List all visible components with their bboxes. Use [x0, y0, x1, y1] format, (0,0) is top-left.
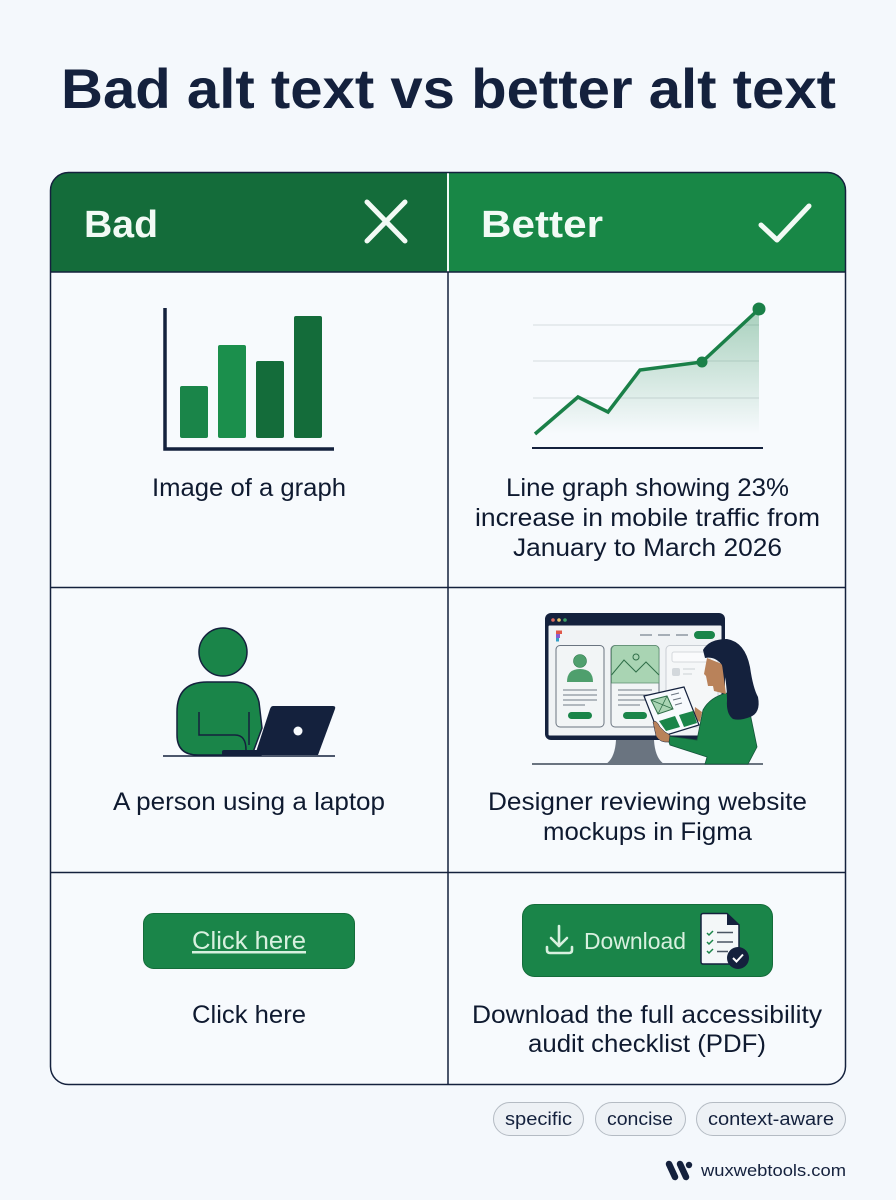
tag: concise: concise	[607, 1108, 673, 1129]
button: click here	[144, 914, 354, 968]
icon: download arrow	[547, 926, 572, 953]
tag: context-aware: context-aware	[708, 1108, 834, 1129]
header: bad column	[50, 172, 448, 272]
icon: checklist document	[701, 914, 749, 969]
button label: Download	[584, 928, 686, 954]
tag: context-aware	[696, 1102, 846, 1136]
woman with printed mockup	[644, 639, 759, 764]
comparison table	[50, 172, 846, 1085]
icon: bar chart	[165, 308, 334, 449]
text: better alt link: Download the full accessibility	[472, 1001, 823, 1029]
icon: cross	[367, 202, 405, 241]
illustration: designer reviewing mockups	[532, 613, 763, 764]
button: download	[522, 904, 772, 976]
text: bad alt person: A person using a laptop	[113, 788, 385, 816]
text: better alt graph: increase in mobile traffic from	[475, 504, 820, 532]
header: better column	[448, 172, 846, 272]
heading: Better: Better	[481, 204, 603, 246]
icon: person using laptop	[163, 628, 335, 756]
text: better alt link: audit checklist (PDF)	[528, 1030, 766, 1058]
text: better alt person: Designer reviewing website	[488, 788, 807, 816]
footer brand	[669, 1161, 846, 1180]
tag: concise	[596, 1102, 686, 1136]
text: bad alt link: Click here	[192, 1001, 306, 1029]
brand name: wuxwebtools.com	[700, 1161, 846, 1180]
text: better alt link	[472, 1001, 823, 1058]
text: better alt graph: Line graph showing 23%	[506, 474, 789, 502]
icon: check mark	[761, 206, 809, 240]
heading: Bad: Bad	[84, 204, 158, 246]
tag: specific: specific	[505, 1108, 572, 1129]
text: better alt person: mockups in Figma	[543, 818, 752, 846]
text: better alt person	[488, 788, 807, 846]
text: better alt graph	[475, 474, 820, 562]
line chart	[532, 302, 766, 448]
tag: specific	[494, 1102, 584, 1136]
text: bad alt graph: Image of a graph	[152, 474, 346, 502]
monitor	[545, 613, 725, 740]
title: Bad alt text vs better alt text	[61, 57, 836, 120]
monitor stand	[606, 740, 664, 764]
icon: brand logo	[669, 1164, 686, 1177]
button: click here: Click here	[192, 927, 306, 955]
text: better alt graph: January to March 2026	[513, 534, 782, 562]
